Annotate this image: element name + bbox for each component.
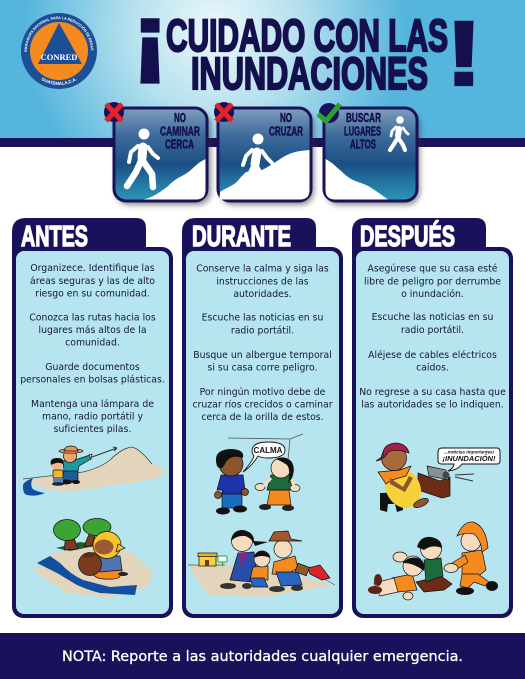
text block: antes: suficientes pilas. (54, 424, 131, 435)
text block: despues: radio portátil. (401, 325, 464, 336)
illustration: family walking to shelter (188, 530, 335, 597)
text block: antes: mano, radio portátil y (42, 412, 143, 422)
heading tab: antes (12, 218, 146, 260)
heading tab: durante (182, 218, 316, 260)
text block: antes: riesgo en su comunidad. (35, 288, 150, 300)
text block: antes: comunidad. (65, 338, 120, 348)
icon: red cross (214, 102, 234, 122)
text block: antes: Mantenga una lámpara de (31, 399, 154, 410)
illustration: woman listening to the radio: ...noticias importantes! (444, 450, 495, 454)
text block: despues: o inundación. (401, 289, 464, 300)
text block: antes: Conozca las rutas hacia los (29, 312, 156, 324)
logo: CONRED: CONRED (41, 52, 77, 62)
text block: despues: Escuche las noticias en su (372, 312, 493, 323)
footer note (0, 633, 525, 679)
sign: buscar lugares altos: LUGARES (344, 124, 381, 138)
panel: durante (182, 218, 343, 618)
heading tab: antes: ANTES (21, 221, 88, 253)
text block: durante: autoridades. (233, 289, 292, 300)
header background (0, 0, 525, 147)
heading tab: durante: DURANTE (192, 221, 291, 253)
text block: durante: cruzar ríos crecidos o caminar (192, 400, 333, 410)
illustration: woman listening to the radio: ¡INUNDACIÓN! (443, 454, 496, 463)
icon: walking person on slope (243, 134, 272, 190)
logo: CONRED: GUATEMALA,C.A. (42, 78, 77, 86)
sign: no caminar cerca: NO (174, 111, 186, 125)
sign: buscar lugares altos: ALTOS (350, 138, 376, 152)
text block: durante: instrucciones de las (216, 276, 309, 288)
text block: antes: áreas seguras y las de alto (30, 276, 155, 287)
sign: no caminar cerca (104, 102, 211, 205)
text block: durante: Busque un albergue temporal (193, 350, 332, 361)
footer note: NOTA: Reporte a las autoridades cualquier emergencia. (62, 649, 463, 665)
sign: no caminar cerca: CAMINAR (160, 124, 200, 138)
sign: no cruzar (214, 102, 314, 205)
illustration: two people with calma speech bubble: CALMA (254, 446, 283, 455)
icon: red cross (104, 102, 124, 122)
text block: durante: Conserve la calma y siga las (196, 264, 329, 274)
heading tab: despues (352, 218, 486, 260)
sign: buscar lugares altos: BUSCAR (346, 111, 381, 125)
sign: no cruzar: NO (280, 111, 292, 125)
sign: no cruzar: CRUZAR (269, 124, 303, 138)
heading tab: despues: DESPUÉS (360, 219, 455, 253)
text block: durante: si su casa corre peligro. (208, 362, 317, 374)
text block: durante: radio portátil. (231, 326, 294, 336)
icon: green check (318, 103, 340, 123)
text block: despues: libre de peligro por derrumbe (364, 276, 501, 288)
sign: no caminar cerca: CERCA (165, 138, 194, 152)
text block: antes: Organizece. Identifique las (30, 263, 155, 274)
illustration: woman with pot by the river (33, 518, 153, 598)
title (131, 0, 483, 105)
illustration: rescuer helping two children (368, 522, 498, 600)
text block: despues: Asegúrese que su casa esté (368, 264, 498, 274)
illustration: two people with calma speech bubble (214, 434, 303, 514)
illustration: man pointing to high ground (23, 446, 167, 496)
text block: despues: las autoridades se lo indiquen. (361, 400, 504, 410)
icon: walking person (127, 128, 158, 187)
panel: despues (352, 218, 513, 618)
text block: durante: Escuche las noticias en su (202, 312, 323, 324)
icon: walking person small (390, 116, 408, 150)
sign: buscar lugares altos (318, 103, 420, 205)
text block: despues: caídos. (416, 362, 449, 374)
logo: CONRED (21, 13, 97, 89)
text block: antes: Guarde documentos (45, 362, 140, 373)
text block: antes: lugares más altos de la (38, 325, 147, 336)
text block: durante: Por ningún motivo debe de (200, 387, 326, 398)
text block: antes: personales en bolsas plásticas. (20, 374, 165, 386)
text block: despues: No regrese a su casa hasta que (359, 387, 506, 398)
panel: antes (12, 218, 173, 618)
text block: despues: Aléjese de cables eléctricos (368, 350, 497, 361)
text block: durante: cerca de la orilla de estos. (201, 412, 324, 423)
title: ! (445, 3, 483, 105)
illustration: woman listening to the radio (376, 443, 500, 515)
